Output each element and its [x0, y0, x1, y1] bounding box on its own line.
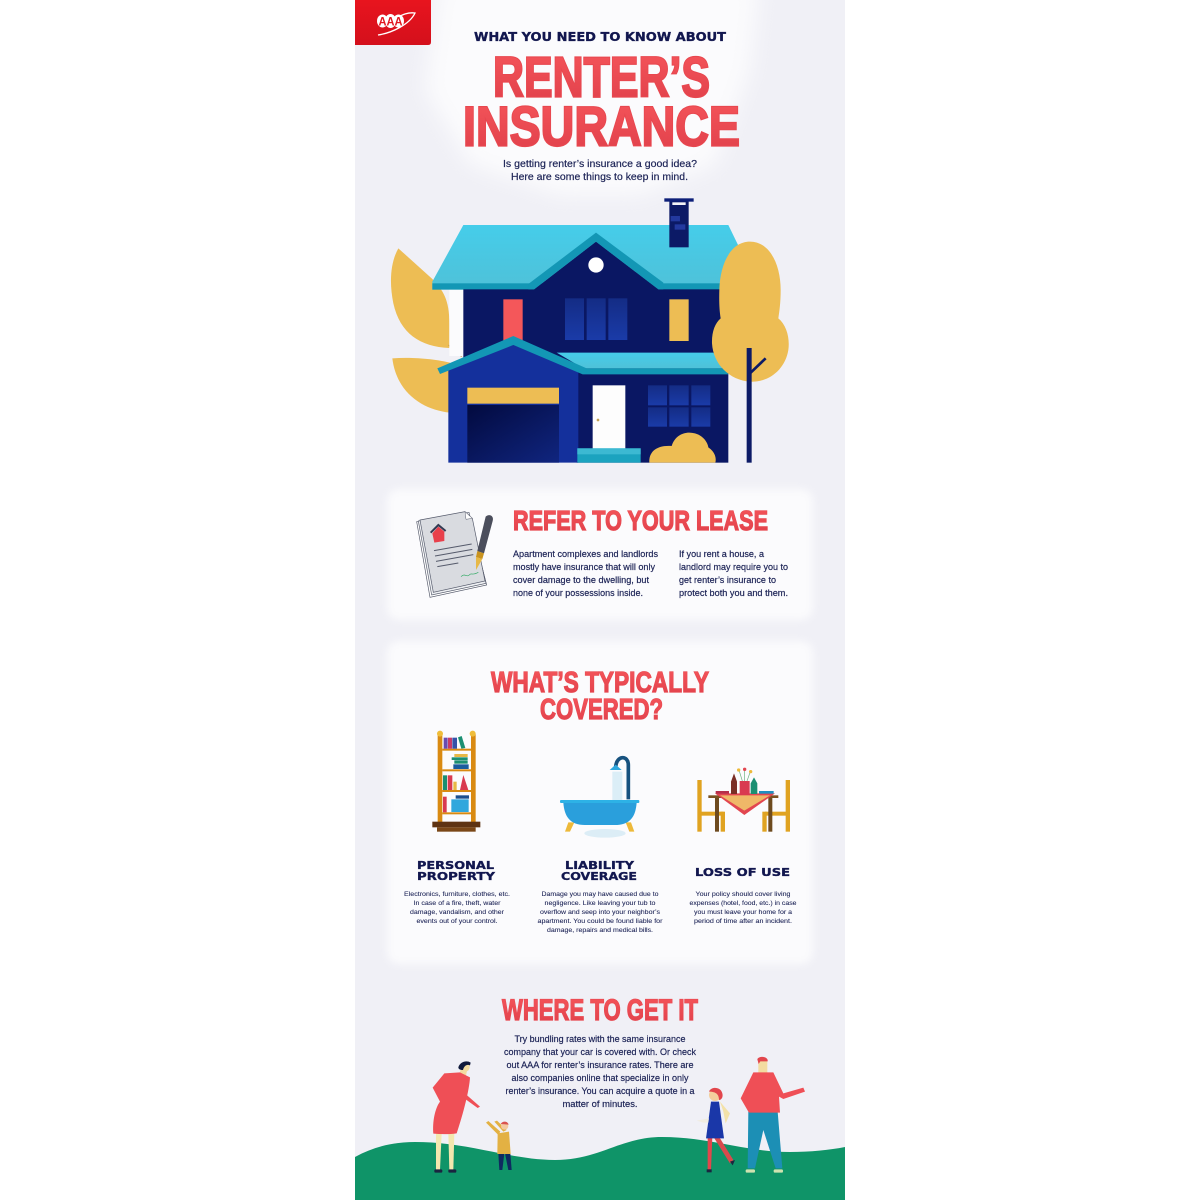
infographic page — [355, 0, 845, 1200]
where to get it text: company that your car is covered with. Or check — [504, 1047, 696, 1058]
white wall strip — [449, 289, 465, 356]
title line two: INSURANCE — [463, 94, 740, 158]
item: liability coverage: overflow and seep into your neighbor’s — [540, 909, 661, 916]
title line one: RENTER’S — [493, 46, 710, 110]
item: personal property: PROPERTY — [417, 870, 496, 883]
heading: COVERED? — [540, 694, 663, 726]
item: liability coverage: Damage you may have caused due to — [542, 891, 659, 898]
where to get it text: also companies online that specialize in only — [512, 1073, 689, 1084]
garage — [437, 336, 587, 463]
item: liability coverage: LIABILITY — [565, 859, 635, 872]
tree — [712, 242, 789, 463]
intro text: Is getting renter’s insurance a good idea? — [503, 158, 697, 170]
item: liability coverage — [538, 859, 663, 934]
intro text: Here are some things to keep in mind. — [511, 171, 688, 183]
lower window — [648, 385, 710, 427]
icon: bookshelf — [432, 731, 480, 832]
lease text column one: mostly have insurance that will only — [513, 562, 655, 573]
heading: REFER TO YOUR LEASE — [513, 505, 768, 536]
green hill — [355, 1137, 845, 1200]
gable — [528, 233, 663, 290]
chimney — [664, 198, 694, 247]
item: liability coverage: negligence. Like leaving your tub to — [544, 900, 656, 907]
lease text column one: Apartment complexes and landlords — [513, 549, 658, 560]
lease text column two: protect both you and them. — [679, 588, 788, 599]
item: loss of use: expenses (hotel, food, etc.) in case — [690, 900, 797, 907]
woman — [433, 1061, 480, 1173]
item: loss of use: LOSS OF USE — [695, 866, 790, 879]
where to get it text: out AAA for renter’s insurance rates. There are — [506, 1060, 694, 1071]
people illustration — [433, 1057, 805, 1173]
upper storey — [463, 289, 727, 377]
kicker line: WHAT YOU NEED TO KNOW ABOUT — [474, 30, 727, 44]
house illustration — [391, 198, 789, 463]
lease text column one: none of your possessions inside. — [513, 588, 643, 599]
icon: bathtub — [560, 758, 639, 838]
lease text column one — [513, 549, 658, 599]
AAA logo: AAA — [378, 14, 403, 28]
where to get it text — [504, 1034, 696, 1110]
front door — [577, 385, 641, 463]
item: personal property: events out of your control. — [416, 918, 498, 925]
where to get it text: renter’s insurance. You can acquire a quote in a — [506, 1086, 695, 1097]
icon: dining table — [697, 768, 790, 832]
lease text column two: landlord may require you to — [679, 562, 788, 573]
lease text column two: get renter’s insurance to — [679, 575, 776, 586]
panel: what's typically covered — [387, 641, 813, 964]
lease text column one: cover damage to the dwelling, but — [513, 575, 649, 586]
item: loss of use: Your policy should cover living — [696, 891, 791, 898]
where to get it text: matter of minutes. — [562, 1099, 638, 1110]
heading: where to get it: WHERE TO GET IT — [502, 994, 698, 1027]
icon: lease document and pen — [417, 512, 493, 597]
item: liability coverage: damage, repairs and medical bills. — [547, 927, 653, 934]
item: loss of use — [690, 866, 797, 925]
item: liability coverage: COVERAGE — [561, 870, 637, 883]
heading — [491, 667, 709, 726]
left leaves — [391, 248, 450, 413]
item: personal property: In case of a fire, theft, water — [414, 900, 501, 907]
panel: refer to your lease — [387, 489, 813, 620]
item: liability coverage: apartment. You could be found liable for — [538, 918, 663, 925]
item: loss of use: period of time after an incident. — [694, 918, 792, 925]
lease text column two: If you rent a house, a — [679, 549, 765, 560]
AAA logo — [355, 0, 431, 45]
item: personal property: Electronics, furniture, clothes, etc. — [404, 891, 510, 898]
lease text column two — [679, 549, 788, 599]
title — [463, 30, 740, 158]
item: personal property: PERSONAL — [417, 859, 494, 872]
lower storey — [577, 353, 728, 463]
item: personal property: damage, vandalism, and other — [410, 909, 505, 916]
bush — [649, 433, 716, 463]
upper windows — [503, 298, 689, 341]
item: personal property — [404, 859, 510, 925]
man — [741, 1057, 805, 1173]
item: loss of use: you must leave your home for a — [694, 909, 792, 916]
intro text — [503, 158, 697, 183]
heading: WHAT’S TYPICALLY — [491, 667, 709, 699]
main roof — [432, 225, 757, 290]
girl — [697, 1088, 735, 1172]
toddler — [486, 1121, 512, 1170]
porch roof — [557, 353, 728, 374]
where to get it text: Try bundling rates with the same insurance — [514, 1034, 686, 1045]
